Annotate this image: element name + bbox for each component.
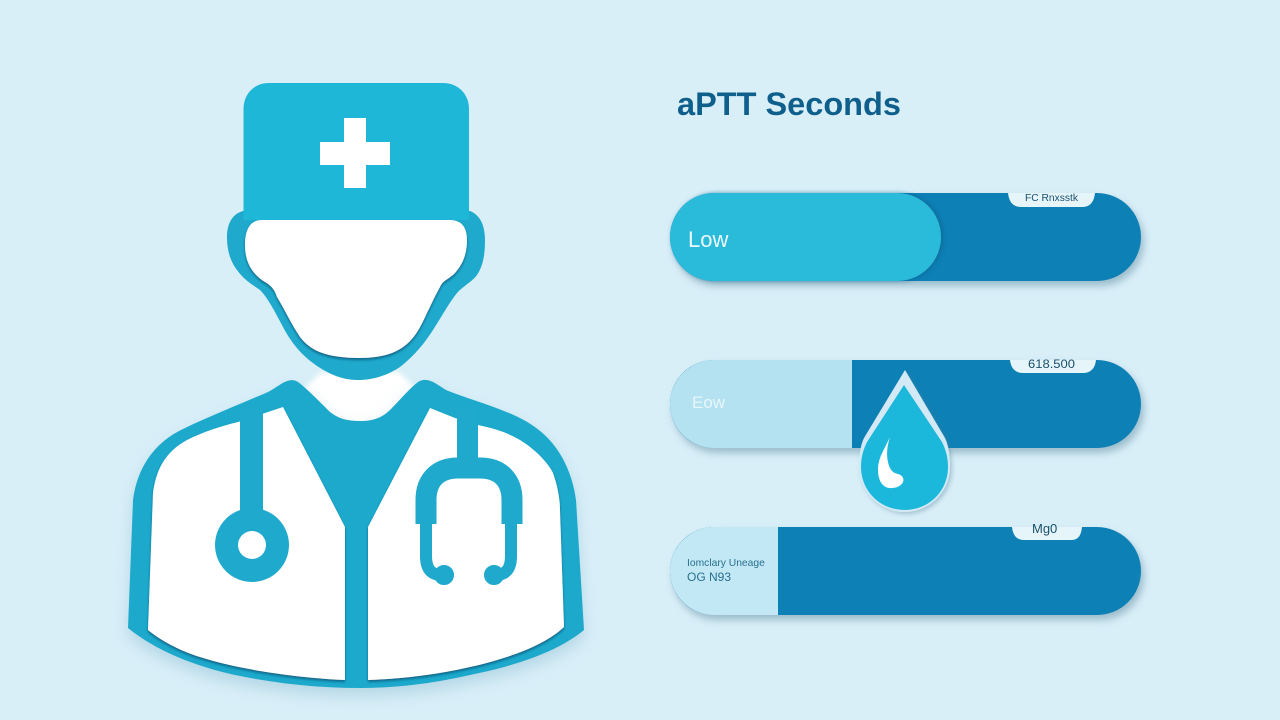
bar 3 track [670,527,1141,615]
bar 2 tab text: 618.500 [1028,359,1075,371]
bar 3 fill [670,527,778,615]
drop highlight [878,437,903,488]
coat right panel [368,408,564,680]
bar 1 track [670,193,1141,281]
stethoscope tube and chest piece [215,408,289,582]
bar 1: low [670,192,1141,281]
drop body [861,385,948,510]
doctor head outline [227,211,485,380]
bar 1 fill [670,193,941,281]
title: aPTT Seconds [677,86,901,122]
cap medical cross [320,118,390,188]
bar 2 track [670,360,1141,448]
bar 3 label: Iomclary Uneage [687,558,765,569]
bar 2 tab [1010,360,1096,373]
bar 2 label: Eow [692,393,726,412]
icon: blood drop [859,370,950,512]
bar 3 tab text: Mg0 [1032,521,1057,536]
bar 1 tab text: FC Rnxsstk [1025,192,1079,204]
bar 3: high [670,521,1141,615]
coat outline [128,380,584,688]
bar 2: mid [670,359,1141,448]
doctor face [245,220,467,358]
bar 3 label: OG N93 [687,570,731,584]
doctor figure [128,83,584,688]
coat left panel [148,407,345,680]
neck [304,372,416,430]
bar 2 fill [670,360,852,448]
bar 3 tab [1012,527,1082,540]
bar 1 tab [1008,193,1095,207]
bar 1 label: Low [688,227,728,252]
doctor cap [244,83,469,220]
stethoscope headset [426,408,512,580]
drop border [859,370,950,512]
